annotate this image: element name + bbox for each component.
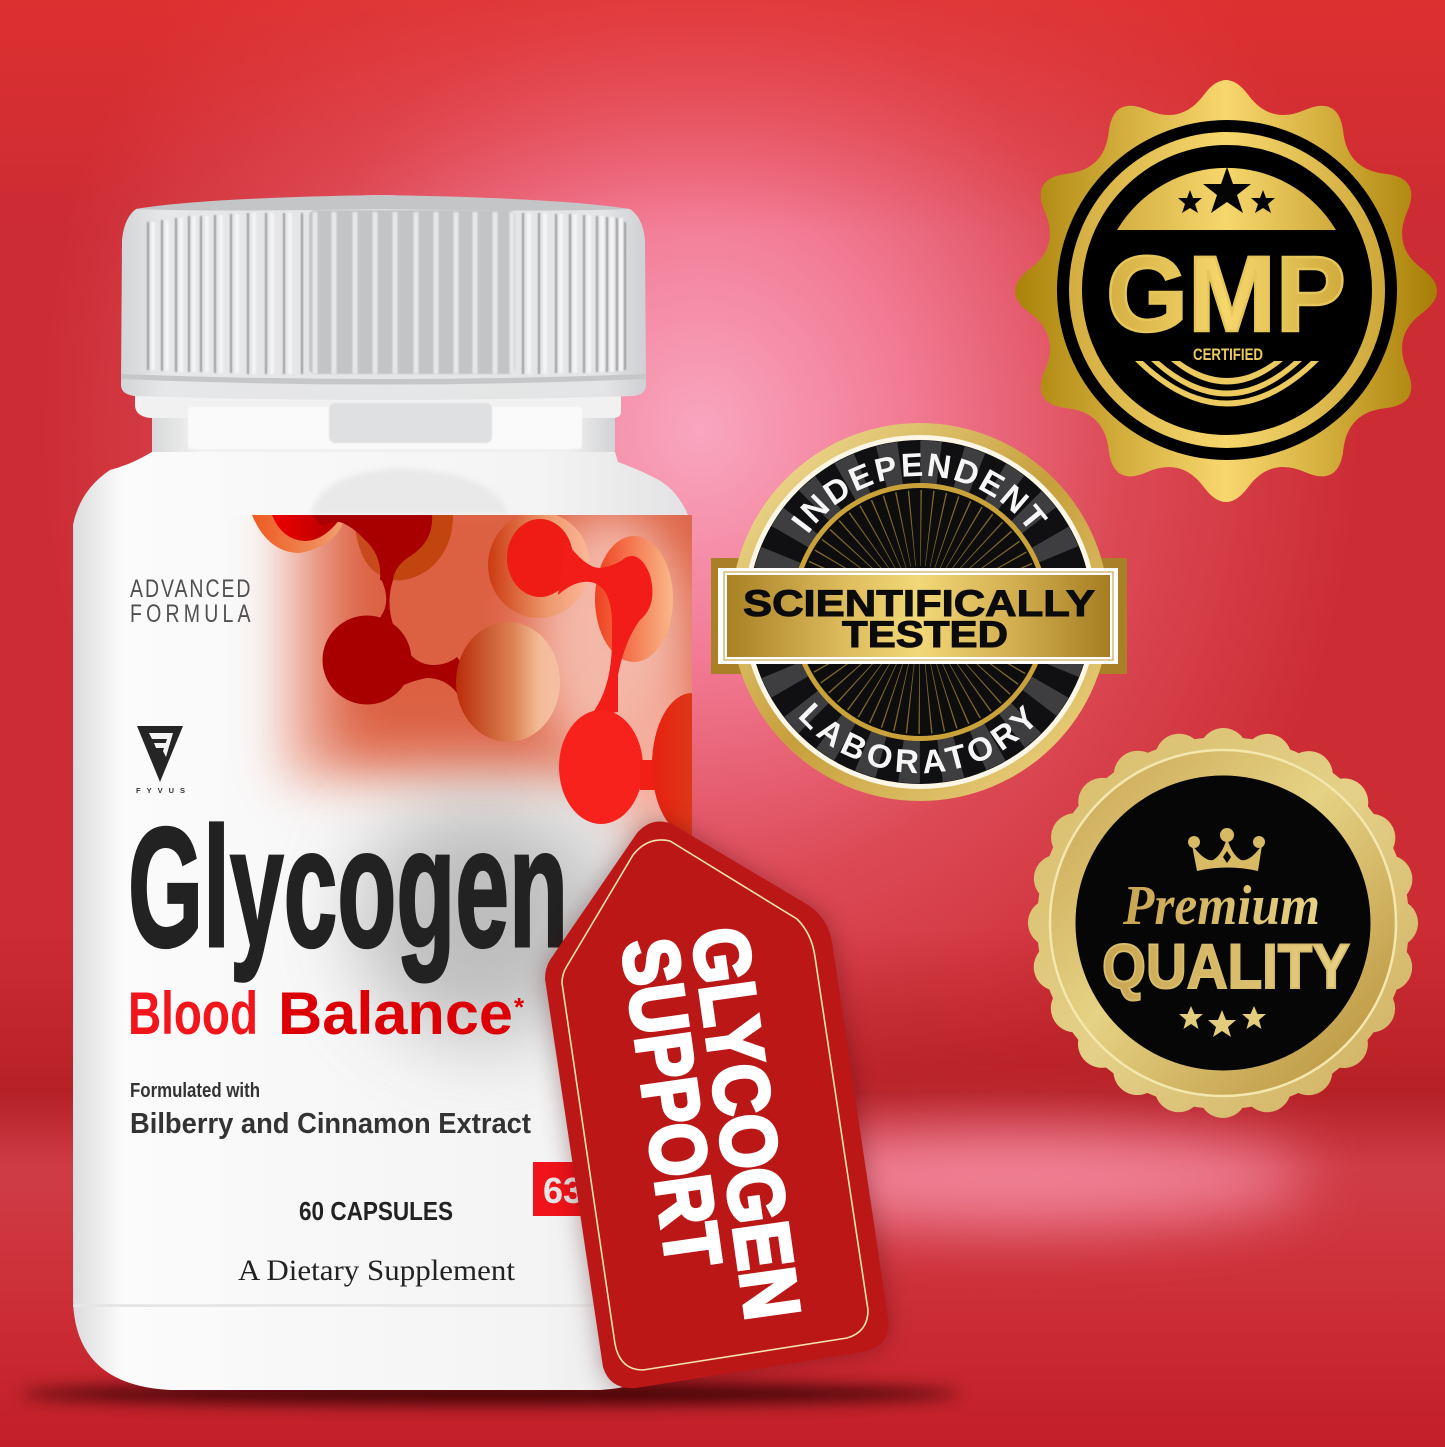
arc lettering	[784, 476, 1056, 612]
badge: premium quality	[1037, 737, 1409, 1109]
GMP text: GMP	[1106, 233, 1346, 354]
subtitle: Balance	[278, 980, 513, 1047]
63 badge	[533, 1162, 593, 1216]
label artwork	[250, 515, 692, 1075]
advanced formula	[130, 575, 255, 628]
bottle body	[73, 452, 692, 1390]
bottle neck	[135, 390, 621, 470]
logo: FYVUS	[136, 786, 185, 795]
badge: scientifically tested	[711, 423, 1127, 801]
advanced formula: ADVANCED	[130, 575, 252, 603]
bottle shadow	[20, 1383, 960, 1405]
molecule graphic	[252, 512, 732, 837]
premium: Premium	[1122, 875, 1320, 937]
crown	[1188, 828, 1265, 871]
dietary: A Dietary Supplement	[238, 1254, 516, 1287]
formulated with: Formulated with	[130, 1080, 260, 1102]
certified: CERTIFIED	[1193, 346, 1263, 364]
tag: glycogen support	[545, 821, 888, 1388]
ribbon flaps	[711, 558, 1127, 674]
GMP arcs	[1135, 361, 1319, 406]
GMP top dome	[1117, 168, 1336, 230]
logo	[136, 726, 185, 795]
63 badge: 63	[543, 1170, 583, 1211]
subtitle: Blood	[128, 980, 258, 1047]
capsules: 60 CAPSULES	[299, 1196, 453, 1226]
tag text: support: SUPPORT	[605, 933, 738, 1272]
background floor	[0, 1090, 1445, 1447]
background wall	[0, 0, 1445, 1130]
subtitle: *	[514, 992, 525, 1022]
stars	[1179, 1006, 1266, 1037]
badge: scientifically tested: INDEPENDENT	[791, 453, 1048, 533]
subtitle	[128, 980, 525, 1047]
extract: Bilberry and Cinnamon Extract	[130, 1108, 531, 1140]
badge: GMP certified	[1015, 80, 1437, 502]
advanced formula: FORMULA	[130, 600, 255, 628]
sun rays	[836, 528, 1004, 696]
tag text: glycogen: GLYCOGEN	[675, 922, 817, 1325]
ribbon	[718, 568, 1118, 664]
cap ribs	[148, 213, 625, 374]
product name: Glycogen	[128, 793, 568, 983]
ribbon text: SCIENTIFICALLY	[743, 583, 1095, 624]
quality: QUALITY	[1102, 932, 1350, 1002]
badge: scientifically tested: TESTED	[842, 614, 1008, 655]
GMP stars	[1178, 167, 1275, 213]
bottle cap	[121, 195, 646, 400]
badge: scientifically tested: LABORATORY	[798, 702, 1034, 774]
bottle	[73, 195, 735, 1390]
